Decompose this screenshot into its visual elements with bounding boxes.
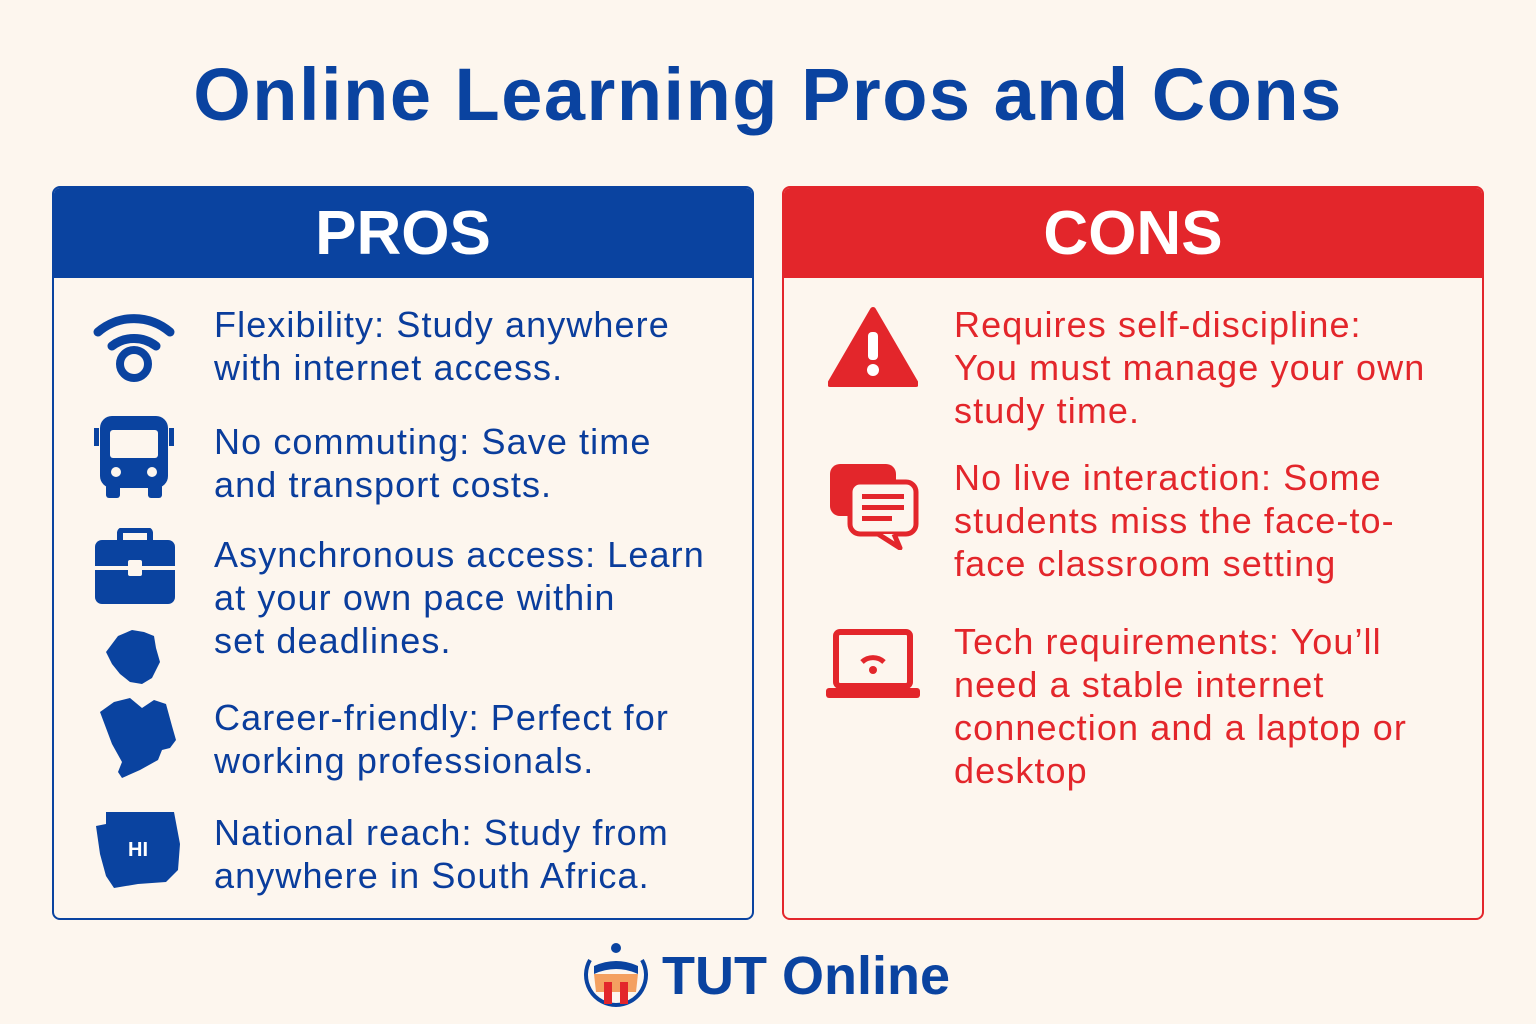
icon: bus: [94, 416, 174, 498]
text: self-discipline: You must manage your own: [954, 347, 1425, 388]
text: no live interaction: face classroom setting: [954, 543, 1336, 584]
icon: person: [100, 630, 176, 778]
text: national reach: [214, 812, 669, 896]
text: commuting: and transport costs.: [214, 464, 552, 505]
cons heading: CONS: [1043, 199, 1223, 268]
icon: map: [96, 812, 180, 888]
title: Online Learning Pros and Cons: [193, 53, 1343, 136]
text: national reach: National reach: Study from: [214, 812, 669, 853]
text: career: [214, 697, 669, 781]
text: tech requirements: connection and a laptop or: [954, 707, 1407, 748]
text: tech requirements: desktop: [954, 750, 1088, 791]
text: flexibility: [214, 304, 670, 388]
icon: chat: [830, 464, 918, 550]
text: no live interaction: [954, 457, 1395, 584]
text: commuting: No commuting: Save time: [214, 421, 651, 462]
text: flexibility: Flexibility: Study anywhere: [214, 304, 670, 345]
text: tech requirements: [954, 621, 1407, 791]
icon: laptop: [826, 629, 920, 698]
text: asynchronous: set deadlines.: [214, 620, 452, 661]
icon: TUT logo: [584, 943, 648, 1007]
text: tech requirements: need a stable internet: [954, 664, 1324, 705]
text: asynchronous: at your own pace within: [214, 577, 616, 618]
text: national reach: anywhere in South Africa.: [214, 855, 650, 896]
text: no live interaction: No live interaction: Some: [954, 457, 1382, 498]
text: flexibility: with internet access.: [214, 347, 563, 388]
text: asynchronous: [214, 534, 705, 661]
icon: wifi: [94, 314, 174, 382]
logo: [584, 943, 950, 1007]
text: self-discipline: [954, 304, 1425, 431]
pros heading: [54, 188, 752, 278]
icon: warning: [828, 307, 918, 387]
panel: pros: [52, 186, 754, 920]
text: career: Career-friendly: Perfect for: [214, 697, 669, 738]
panel: cons: [782, 186, 1484, 920]
icon: map: HI: [128, 839, 148, 861]
text: tech requirements: Tech requirements: You’ll: [954, 621, 1382, 662]
pros heading: PROS: [315, 199, 491, 268]
brand text: TUT Online: [662, 946, 950, 1006]
text: self-discipline: study time.: [954, 390, 1140, 431]
icon: briefcase: [95, 528, 175, 604]
text: no live interaction: students miss the face-to-: [954, 500, 1395, 541]
text: self-discipline: Requires self-discipline:: [954, 304, 1362, 345]
text: asynchronous: Asynchronous access: Learn: [214, 534, 705, 575]
text: career: working professionals.: [214, 740, 594, 781]
text: commuting: [214, 421, 651, 505]
cons heading: [784, 188, 1482, 278]
